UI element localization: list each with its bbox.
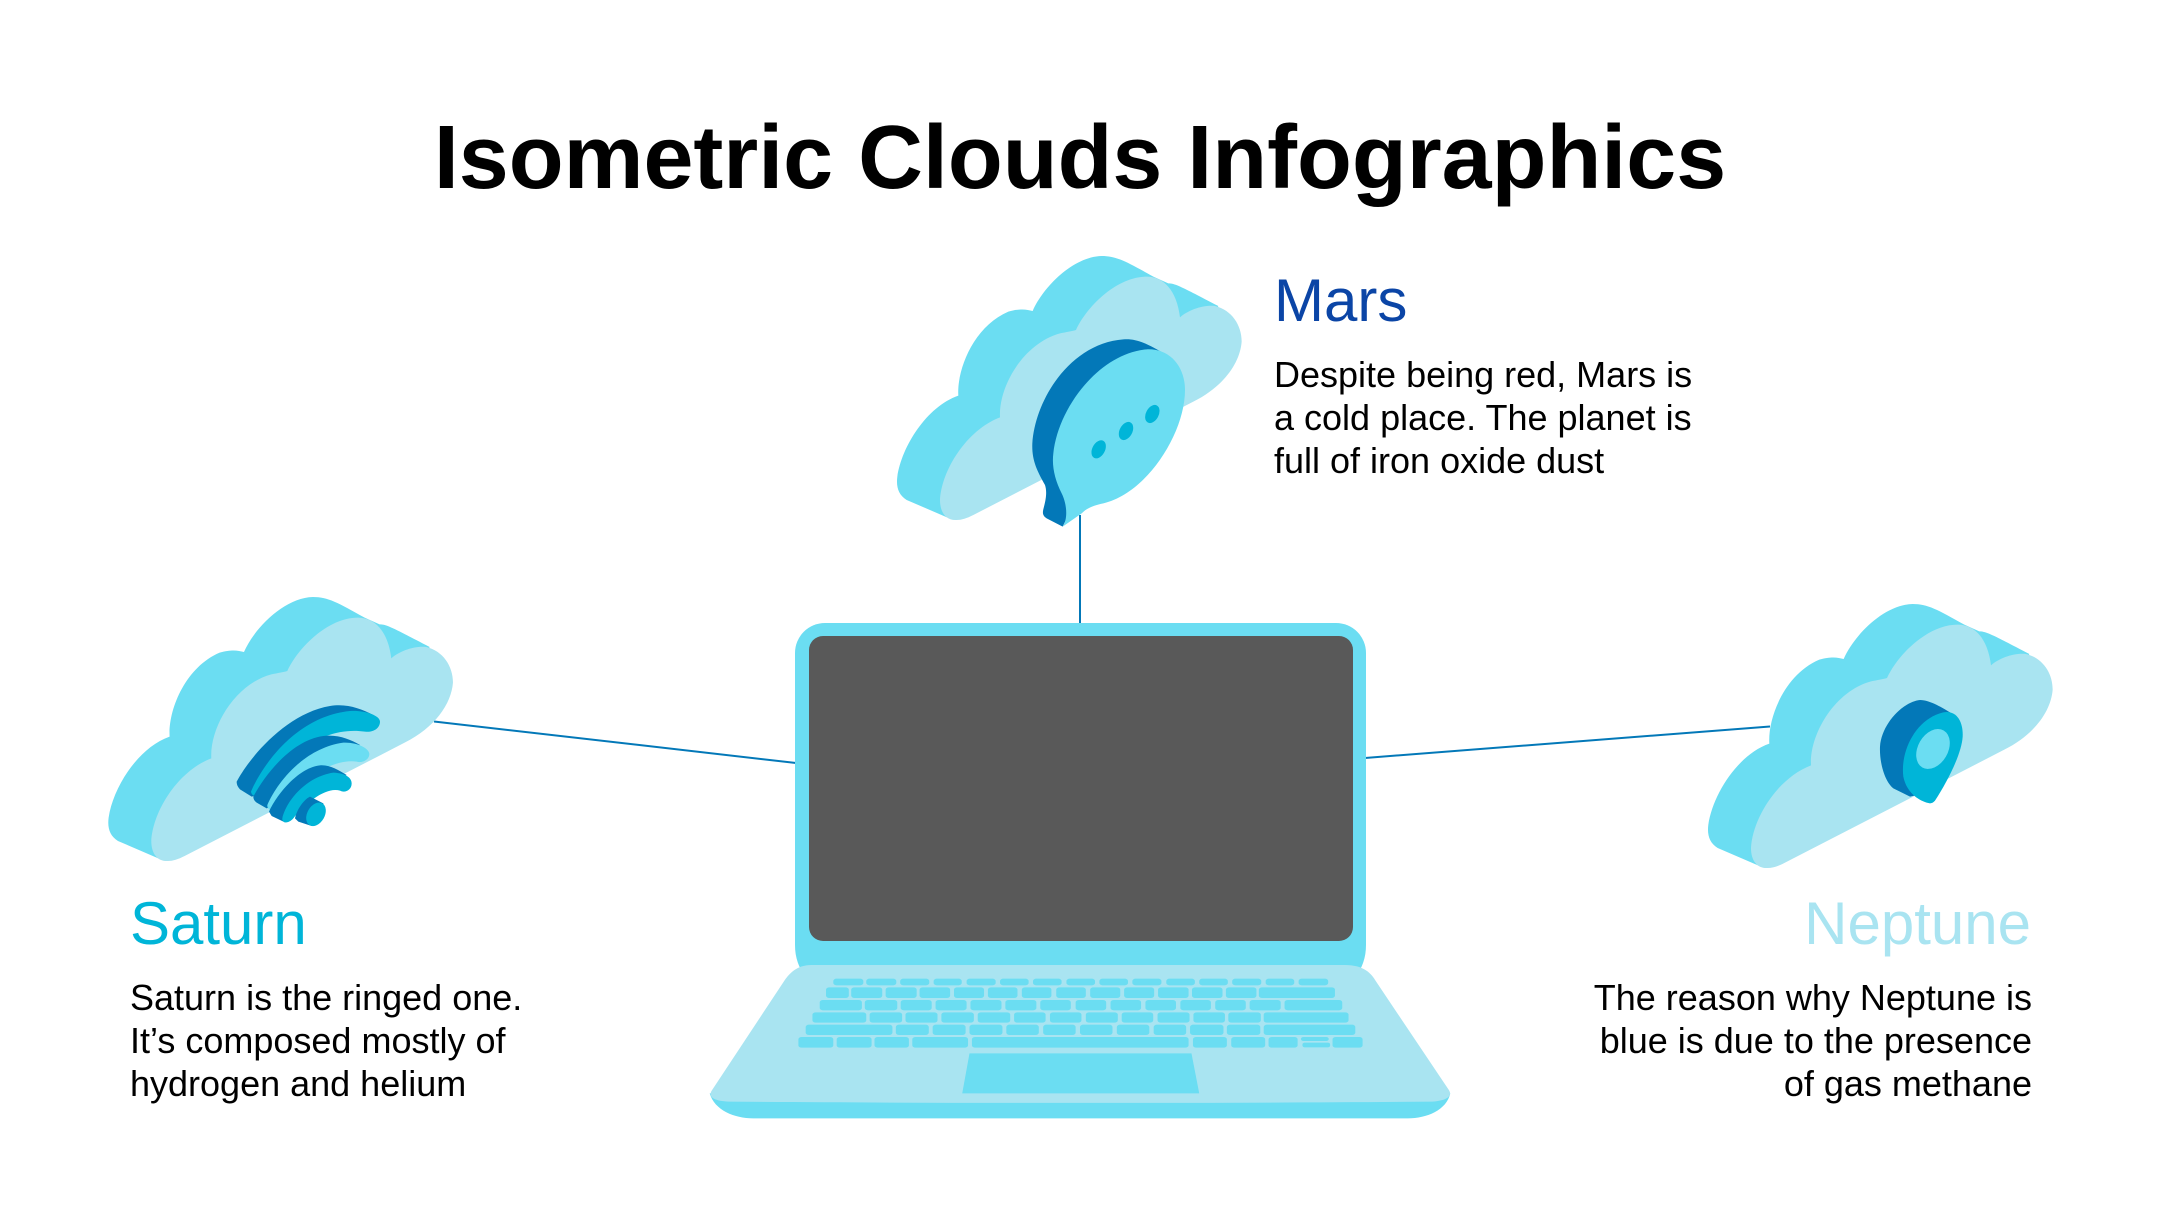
text block: Mars: Mars	[1274, 267, 1407, 334]
icon: speech bubble	[1032, 339, 1185, 527]
laptop	[710, 623, 1450, 1118]
text block: Mars: Despite being red, Mars is	[1274, 354, 1692, 395]
cloud: Neptune	[1708, 604, 2053, 868]
cloud: Saturn	[108, 597, 453, 861]
laptop screen	[809, 636, 1353, 941]
laptop base	[710, 965, 1450, 1118]
text block: Neptune	[1594, 890, 2032, 1104]
keyboard	[798, 979, 1363, 1048]
title: Isometric Clouds Infographics	[434, 108, 1726, 208]
text block: Neptune: of gas methane	[1784, 1063, 2032, 1104]
cloud: Mars	[897, 256, 1242, 527]
text block: Saturn: hydrogen and helium	[130, 1063, 466, 1104]
text block: Mars	[1274, 267, 1692, 481]
text block: Neptune: blue is due to the presence	[1600, 1020, 2032, 1061]
text block: Saturn: Saturn	[130, 890, 307, 957]
text block: Neptune: Neptune	[1804, 890, 2031, 957]
text block: Mars: full of iron oxide dust	[1274, 440, 1604, 481]
connector: laptop to Saturn cloud	[434, 722, 796, 763]
text block: Mars: a cold place. The planet is	[1274, 397, 1692, 438]
text block: Neptune: The reason why Neptune is	[1594, 977, 2032, 1018]
connector: laptop to Neptune cloud	[1365, 726, 1770, 758]
icon: location pin	[1880, 700, 1963, 803]
trackpad	[962, 1053, 1199, 1093]
laptop lid	[795, 623, 1366, 976]
text block: Saturn: It’s composed mostly of	[130, 1020, 506, 1061]
text block: Saturn: Saturn is the ringed one.	[130, 977, 522, 1018]
icon: wifi	[237, 705, 380, 830]
text block: Saturn	[130, 890, 522, 1104]
connector: laptop to Mars cloud	[1079, 515, 1081, 624]
